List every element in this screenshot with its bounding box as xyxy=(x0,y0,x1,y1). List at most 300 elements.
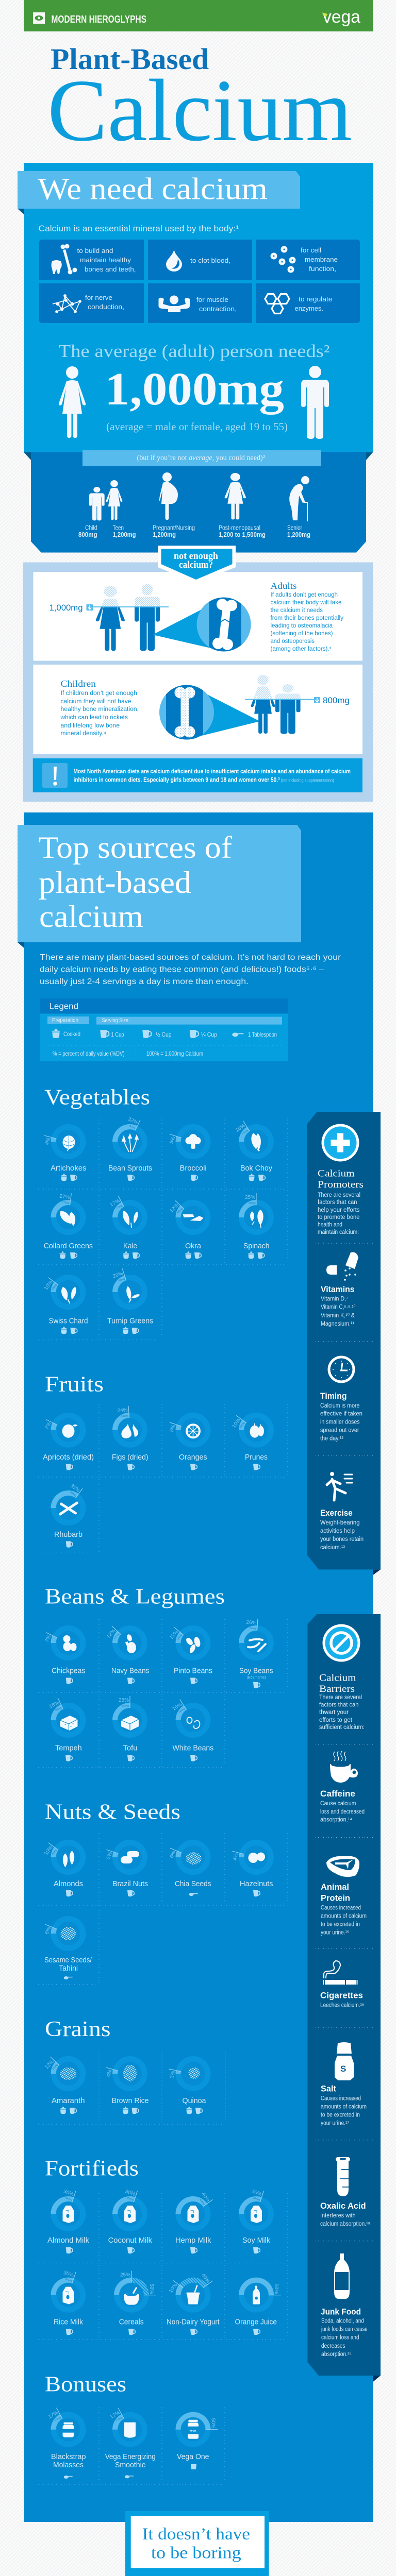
food: rice milk: 300mg xyxy=(65,2278,73,2282)
heading ribbon: top sources: plant-based xyxy=(39,866,191,900)
tile: nerve conduction xyxy=(39,283,144,323)
food: hemp milk: 400mg xyxy=(199,2198,206,2206)
text: adults: calcium their body will take xyxy=(270,600,341,606)
heading: calcium promoters: Promoters xyxy=(318,1180,364,1190)
intro text: There are several xyxy=(319,1694,362,1701)
legend item: cooked xyxy=(51,1029,80,1038)
food: spinach xyxy=(239,1193,274,1259)
food: white beans: White Beans xyxy=(172,1744,213,1753)
food: almonds xyxy=(42,1840,86,1896)
food: vega energizing smoothie: Smoothie xyxy=(115,2461,146,2469)
food: brazil nuts: Brazil Nuts xyxy=(112,1880,148,1888)
label: 800mg threshold: 800mg xyxy=(323,696,350,705)
text: vitamins: Magnesium.¹¹ xyxy=(321,1321,354,1327)
tile: cell membrane: function, xyxy=(309,265,336,273)
food: blackstrap molasses: 17% xyxy=(47,2410,59,2420)
food: swiss chard: Swiss Chard xyxy=(48,1317,88,1326)
food: prunes: 100mg xyxy=(239,1421,245,1429)
intro text: factors that can xyxy=(318,1199,357,1206)
text: oxalic acid: Interferes with xyxy=(320,2213,356,2219)
text: salt: amounts of calcium xyxy=(321,2104,367,2110)
food: sesame seeds: 6% xyxy=(44,1926,52,1935)
intro text xyxy=(318,1192,360,1235)
number: 1,000mg: 1,000mg xyxy=(105,364,284,415)
food: rice milk: Rice Milk xyxy=(54,2318,84,2326)
text: timing: effective if taken xyxy=(320,1411,362,1417)
food: tempeh: 18% xyxy=(48,1700,60,1710)
icon: woman xyxy=(59,366,86,438)
text: children: which can lead to rickets xyxy=(60,715,128,721)
icon: adult figures with hatched upper bodies xyxy=(92,584,169,651)
callout: it doesn't have to be boring: to be boring xyxy=(151,2544,241,2563)
food: tofu: 250mg xyxy=(122,1704,129,1707)
food: cereals xyxy=(114,2271,156,2335)
heading: beans and legumes: Beans & Legumes xyxy=(45,1585,225,1608)
food: swiss chard: 10% xyxy=(43,1280,54,1291)
tile: clot blood: to clot blood, xyxy=(190,257,230,264)
food: white beans xyxy=(170,1699,213,1761)
text: exercise: calcium.¹³ xyxy=(320,1545,345,1551)
icon: hexagon molecule xyxy=(265,294,289,313)
tile: bones and teeth: to build and xyxy=(77,247,113,255)
text: adults: the calcium it needs xyxy=(270,607,323,614)
food: pinto beans xyxy=(167,1625,212,1684)
callout: it doesn't have to be boring xyxy=(125,2511,269,2576)
heading ribbon: top sources xyxy=(18,825,301,948)
text: exercise: your bones retain xyxy=(320,1536,364,1543)
heading: calcium promoters: Calcium xyxy=(318,1169,355,1179)
food: sesame seeds: Sesame Seeds/ xyxy=(44,1956,92,1964)
heading: fruits: Fruits xyxy=(45,1373,104,1397)
text: animal protein: Protein xyxy=(321,1893,350,1903)
text: children: healthy bone mineralization, xyxy=(61,706,139,713)
text: salt: Salt xyxy=(321,2083,336,2093)
warning bar: Most North American diets are calcium deficient due to insufficient calcium intake and an abundance of calcium xyxy=(73,768,351,775)
food: coconut milk: 300mg xyxy=(126,2196,134,2201)
heading: calcium barriers: Calcium xyxy=(319,1673,356,1684)
food: hemp milk: Hemp Milk xyxy=(175,2236,211,2245)
card: children xyxy=(33,665,362,754)
text: exercise: Weight-bearing xyxy=(320,1520,360,1526)
legend item: tablespoon: 1 Tablespoon xyxy=(248,1031,277,1038)
food: navy beans: 120mg xyxy=(113,1633,120,1640)
intro text: efforts to get xyxy=(319,1717,353,1723)
labels: child xyxy=(78,524,97,538)
tile: cell membrane xyxy=(256,240,360,280)
icon: flexing figure xyxy=(159,296,190,312)
labels: teen: Teen xyxy=(112,524,124,532)
food: apricots xyxy=(42,1413,94,1470)
food: almonds: 10% xyxy=(43,1845,54,1856)
icon: test tube xyxy=(336,2157,350,2196)
text: salt: to be excreted in xyxy=(321,2112,360,2119)
legend xyxy=(40,998,288,1061)
label: 1,000mg threshold: 1,000mg xyxy=(50,603,82,613)
labels: pregnant xyxy=(153,524,195,538)
labels: child: Child xyxy=(85,524,97,532)
food: figs: 240mg xyxy=(121,1414,128,1417)
icon: child figures with hatched upper bodies xyxy=(245,675,315,734)
heading: fortifieds: Fortifieds xyxy=(45,2157,139,2180)
bar: but if you are not average xyxy=(82,450,321,466)
text: adults: (softening of the bones) xyxy=(270,631,333,637)
food: amaranth: Amaranth xyxy=(52,2097,85,2105)
labels: senior: Senior xyxy=(287,524,302,532)
text: timing: the day.¹² xyxy=(320,1436,343,1442)
food: prunes xyxy=(229,1413,274,1470)
heading: nuts and seeds: Nuts & Seeds xyxy=(45,1801,180,1824)
food: tofu: 25% xyxy=(119,1698,129,1703)
food: blackstrap molasses: Molasses xyxy=(53,2461,84,2469)
icon: drop xyxy=(166,249,182,272)
text: animal protein: Animal xyxy=(321,1882,349,1892)
heading ribbon: we need calcium xyxy=(18,171,300,214)
labels: post-menopausal: 1,200 to 1,500mg xyxy=(219,531,266,538)
food: chickpeas xyxy=(42,1625,86,1684)
legend item: half cup: ½ Cup xyxy=(156,1031,172,1038)
icon: cigarette xyxy=(323,1961,358,1985)
food: almonds: Almonds xyxy=(54,1880,83,1888)
warning bar: inhibitors in common diets. Especially girls between 9 and 18 and women over 50.³ xyxy=(73,776,280,783)
text: salt: your urine.¹⁷ xyxy=(321,2121,349,2127)
food: coconut milk: Coconut Milk xyxy=(108,2236,153,2245)
food: soy beans: 26% xyxy=(246,1620,257,1626)
labels: senior: 1,200mg xyxy=(287,531,310,538)
text: caffeine xyxy=(320,1789,365,1823)
legend item: cooked: Cooked xyxy=(63,1030,80,1038)
legend: % = percent of daily value (%DV) xyxy=(53,1051,125,1057)
text: caffeine: absorption.¹⁴ xyxy=(320,1817,352,1823)
food: almonds: 100mg xyxy=(51,1849,57,1856)
intro text: There are several xyxy=(318,1192,360,1198)
legend item: 1 cup xyxy=(100,1030,124,1038)
food: soy milk xyxy=(239,2187,274,2253)
food: orange juice: Orange Juice xyxy=(235,2318,277,2326)
food: brown rice: Brown Rice xyxy=(111,2097,148,2105)
text: animal protein: to be excreted in xyxy=(321,1922,360,1928)
text: junk food: Junk Food xyxy=(321,2307,361,2316)
food: oranges: Oranges xyxy=(179,1453,207,1462)
food: okra xyxy=(167,1200,210,1259)
text: timing: Timing xyxy=(320,1391,346,1401)
food: soy milk: 30% xyxy=(251,2189,262,2197)
food: quinoa: 3% xyxy=(169,2071,176,2079)
food: brown rice xyxy=(104,2056,148,2114)
intro text: sufficient calcium: xyxy=(319,1724,365,1731)
food: turnip greens xyxy=(107,1268,153,1334)
tile: muscle contraction: contraction, xyxy=(199,305,237,313)
food: rhubarb: Rhubarb xyxy=(54,1531,82,1539)
food: amaranth: 120mg xyxy=(52,2063,58,2071)
food: non-dairy yogurt: 10% xyxy=(168,2282,179,2294)
tile: clot blood xyxy=(148,240,252,280)
food: kale xyxy=(108,1196,147,1259)
magnifier cone xyxy=(200,692,260,736)
food: vega one xyxy=(175,2412,218,2469)
intro text: factors that can xyxy=(319,1702,359,1708)
text: animal protein: your urine.¹⁵ xyxy=(321,1930,349,1936)
food: vega one: 50% xyxy=(210,2418,216,2429)
food: brown rice: 4% xyxy=(106,2069,113,2078)
food: bok choy: 160mg xyxy=(241,1129,249,1135)
food: non-dairy yogurt: Non-Dairy Yogurt xyxy=(167,2318,220,2326)
food: broccoli: Broccoli xyxy=(180,1164,207,1173)
food: non-dairy yogurt: 40% xyxy=(200,2273,211,2284)
food: broccoli: 5% xyxy=(169,1136,177,1144)
legend: Serving Size xyxy=(102,1018,128,1024)
food: coconut milk: 30% xyxy=(124,2189,136,2197)
food: bok choy: Bok Choy xyxy=(240,1164,273,1173)
food: okra: Okra xyxy=(185,1242,202,1250)
text: timing: in smaller doses xyxy=(320,1419,360,1425)
text: vitamins: Vitamin C,⁸·⁹·¹⁰ xyxy=(321,1304,356,1311)
food: soy beans: Soy Beans xyxy=(239,1667,273,1675)
food: blackstrap molasses: 170mg xyxy=(54,2416,61,2422)
food: pinto beans: Pinto Beans xyxy=(174,1667,212,1675)
food: quinoa: Quinoa xyxy=(183,2097,206,2105)
text: children: and lifelong low bone xyxy=(61,723,120,729)
callout: not enough calcium: not enough xyxy=(174,551,219,562)
heading: grains: Grains xyxy=(45,2018,110,2041)
sidebar: calcium promoters xyxy=(307,1112,381,1575)
intro text: to promote bone xyxy=(318,1214,360,1221)
food: collard greens: Collard Greens xyxy=(44,1242,93,1250)
food: apricots: Apricots (dried) xyxy=(43,1453,94,1462)
food: white beans: 160mg xyxy=(178,1707,186,1714)
callout: it doesn't have to be boring: It doesn’t have xyxy=(142,2525,250,2544)
food: soy beans: (Edamame) xyxy=(246,1676,266,1680)
food: orange juice: 50% xyxy=(273,2284,279,2294)
food: hazelnuts: 4% xyxy=(232,1853,240,1861)
food: chia seeds: Chia Seeds xyxy=(175,1880,211,1888)
food: soy beans xyxy=(239,1618,274,1688)
tile: muscle contraction: for muscle xyxy=(196,296,228,303)
icon: nerve network xyxy=(53,295,81,313)
text: vitamins: Vitamin K,¹⁰ & xyxy=(321,1313,355,1319)
tile: regulate enzymes: enzymes. xyxy=(295,304,323,312)
food: soy milk: Soy Milk xyxy=(242,2236,271,2245)
tile: bones and teeth: maintain healthy xyxy=(80,256,131,264)
food: vega energizing smoothie: 170mg xyxy=(116,2416,123,2422)
food: oranges: 5% xyxy=(169,1424,177,1433)
text: cigarettes: Leeches calcium.¹⁶ xyxy=(320,2003,364,2009)
text: children: If children don’t get enough xyxy=(61,690,137,697)
food: broccoli xyxy=(167,1124,210,1181)
food: swiss chard: 100mg xyxy=(51,1283,57,1291)
text: oxalic acid xyxy=(320,2201,370,2227)
legend item: quarter cup: ¼ Cup xyxy=(201,1031,217,1038)
heading: calcium barriers: Barriers xyxy=(319,1684,355,1694)
food: hemp milk xyxy=(175,2191,213,2253)
heading ribbon: we need calcium: We need calcium xyxy=(38,172,268,206)
food: brazil nuts: 5% xyxy=(106,1851,113,1860)
bar: but if you are not average: (but if you’re not average, you could need)² xyxy=(137,454,265,462)
text: average adult needs: The average (adult) person needs² xyxy=(59,341,330,361)
food: hemp milk: 40% xyxy=(200,2191,211,2203)
food: rice milk: 30% xyxy=(63,2270,74,2279)
food: almond milk: 30% xyxy=(63,2189,74,2197)
intro text: usually just 2-4 servings a day is more than enough. xyxy=(40,977,249,986)
text: timing xyxy=(320,1391,362,1442)
callout: not enough calcium xyxy=(158,546,236,583)
labels: post-menopausal: Post-menopausal xyxy=(219,524,260,532)
food: spinach: Spinach xyxy=(243,1242,270,1250)
food: navy beans: Navy Beans xyxy=(111,1667,150,1675)
labels: pregnant: 1,200mg xyxy=(153,531,176,538)
heading: calcium barriers xyxy=(319,1673,356,1694)
text: animal protein: Causes increased xyxy=(321,1905,361,1911)
food: navy beans xyxy=(104,1625,150,1684)
food: chia seeds: 6% xyxy=(169,1850,177,1859)
food: vega energizing smoothie: Vega Energizing xyxy=(105,2453,156,2461)
text: adults: Adults xyxy=(270,581,297,591)
food: orange juice xyxy=(235,2278,281,2335)
intro text: help your efforts xyxy=(318,1207,360,1213)
food: kale: Kale xyxy=(123,1242,137,1250)
text: exercise: activities help xyxy=(320,1528,355,1534)
text: cigarettes xyxy=(320,1991,364,2009)
icon: tooth and bone xyxy=(52,244,77,274)
food: turnip greens: 20% xyxy=(112,1271,124,1279)
brand name: MODERN HIEROGLYPHS xyxy=(52,14,146,25)
food: almond milk: 300mg xyxy=(65,2196,73,2201)
legend: Preparation xyxy=(52,1018,78,1024)
tile: nerve conduction: conduction, xyxy=(88,303,124,311)
panel: we need calcium xyxy=(18,163,373,452)
text: junk food: decreases xyxy=(321,2343,345,2349)
text: oxalic acid: calcium absorption.¹⁸ xyxy=(320,2221,370,2227)
food: chickpeas: 7% xyxy=(44,1634,53,1643)
food: artichokes: Artichokes xyxy=(51,1164,87,1173)
icon: post-menopausal woman xyxy=(225,473,246,519)
icon: capsule xyxy=(326,1252,358,1281)
tile: regulate enzymes xyxy=(256,283,360,323)
food: blackstrap molasses xyxy=(46,2408,86,2479)
food: tofu: Tofu xyxy=(123,1744,137,1753)
food: swiss chard xyxy=(42,1275,88,1334)
food: artichokes xyxy=(42,1124,87,1181)
text: cigarettes: Cigarettes xyxy=(320,1991,363,2001)
food: soy beans: 260mg xyxy=(249,1627,257,1630)
food: vega one: Vega One xyxy=(177,2453,209,2461)
food: rhubarb: 350mg xyxy=(70,1490,77,1497)
text: exercise xyxy=(320,1508,364,1551)
labels: teen: 1,200mg xyxy=(112,531,136,538)
text: junk food: absorption.²⁴ xyxy=(321,2351,352,2358)
food: vega one: vega xyxy=(190,2430,196,2433)
card: adults xyxy=(33,572,362,660)
food: blackstrap molasses: Blackstrap xyxy=(51,2453,86,2461)
text: timing: spread out over xyxy=(320,1428,359,1434)
header bar xyxy=(24,0,373,31)
text: children: mineral density.⁴ xyxy=(61,731,106,737)
food: apricots: 7% xyxy=(44,1421,53,1431)
labels: child: 800mg xyxy=(78,531,97,538)
icon: porous bone in magnifier xyxy=(159,685,214,740)
intro text: daily calcium needs by eating these common (and delicious!) foods⁵·⁶ – xyxy=(40,965,324,974)
title: Plant-Based xyxy=(51,42,209,76)
food: white beans: 16% xyxy=(171,1702,183,1712)
food: spinach: 25% xyxy=(245,1195,255,1200)
food: rhubarb: 35% xyxy=(69,1483,81,1494)
icon: senior with cane xyxy=(289,476,309,521)
food: collard greens: 27% xyxy=(59,1194,70,1200)
food: hazelnuts xyxy=(230,1840,274,1896)
food: almond milk: Almond Milk xyxy=(47,2236,90,2245)
icon: modern hieroglyphs eye logo xyxy=(33,12,45,24)
food: bean sprouts: Bean Sprouts xyxy=(108,1164,152,1173)
food: prunes: Prunes xyxy=(245,1453,268,1462)
intro text xyxy=(319,1694,365,1731)
text: oxalic acid: Oxalic Acid xyxy=(320,2201,366,2211)
icon: steak xyxy=(326,1856,359,1877)
legend item: half cup xyxy=(142,1030,172,1038)
legend item: 1 cup: 1 Cup xyxy=(111,1031,124,1038)
food: okra: 120mg xyxy=(176,1207,183,1214)
food: okra: 12% xyxy=(169,1202,180,1214)
text: caffeine: loss and decreased xyxy=(320,1809,365,1815)
food: tempeh xyxy=(47,1698,86,1761)
food: coconut milk xyxy=(108,2187,153,2253)
text: adults xyxy=(270,581,343,652)
food: chia seeds xyxy=(167,1840,211,1896)
text: vitamins: Vitamins xyxy=(321,1284,355,1294)
tile: cell membrane: membrane xyxy=(305,256,338,263)
food: figs xyxy=(112,1406,148,1470)
intro text xyxy=(40,953,341,986)
intro text: Calcium is an essential mineral used by the body:¹ xyxy=(38,224,239,233)
food: spinach: 250mg xyxy=(249,1201,256,1205)
text: junk food: Soda, alcohol, and xyxy=(321,2318,364,2325)
food: bean sprouts: 320mg xyxy=(128,1124,136,1129)
food: tempeh: 180mg xyxy=(55,1706,62,1711)
food: oranges xyxy=(167,1413,210,1470)
labels: pregnant: Pregnant/Nursing xyxy=(153,524,195,532)
icon: man xyxy=(301,366,329,439)
food: collard greens xyxy=(44,1192,93,1259)
warning bar: (not including supplementation) xyxy=(281,778,334,783)
panel: if you are not average xyxy=(24,450,373,552)
text: adults: If adults don’t get enough xyxy=(270,592,338,598)
sidebar: calcium barriers xyxy=(307,1614,381,2382)
icon: soda bottle xyxy=(334,2253,350,2299)
heading: calcium promoters xyxy=(318,1169,364,1190)
food: vega energizing smoothie: 17% xyxy=(109,2410,121,2420)
food: rhubarb xyxy=(51,1482,86,1548)
tile: bones and teeth: bones and teeth, xyxy=(85,265,136,273)
food: figs: Figs (dried) xyxy=(112,1453,148,1462)
title: Calcium xyxy=(47,62,352,160)
food: quinoa xyxy=(167,2056,210,2114)
food: soy milk: 300mg xyxy=(253,2196,260,2201)
icon: runner xyxy=(327,1472,352,1500)
text: vitamins: Vitamin D,⁷ xyxy=(321,1296,348,1302)
food: collard greens: 270mg xyxy=(62,1201,70,1205)
text: animal protein: amounts of calcium xyxy=(321,1913,367,1920)
icon: prohibition sign xyxy=(323,1624,360,1662)
legend: 100% = 1,000mg Calcium xyxy=(146,1051,203,1057)
food: hazelnuts: Hazelnuts xyxy=(240,1880,273,1888)
text: caffeine: Caffeine xyxy=(320,1789,355,1799)
text: salt xyxy=(321,2083,367,2127)
intro text: maintain calcium: xyxy=(318,1229,359,1235)
text: caffeine: Cause calcium xyxy=(320,1801,356,1807)
text: adults: (among other factors).³ xyxy=(270,646,332,652)
intro text: There are many plant-based sources of calcium. It’s not hard to reach your xyxy=(40,953,341,962)
icon: salt shaker: S xyxy=(340,2064,346,2074)
food: brazil nuts xyxy=(104,1840,148,1896)
food: amaranth xyxy=(42,2056,86,2114)
